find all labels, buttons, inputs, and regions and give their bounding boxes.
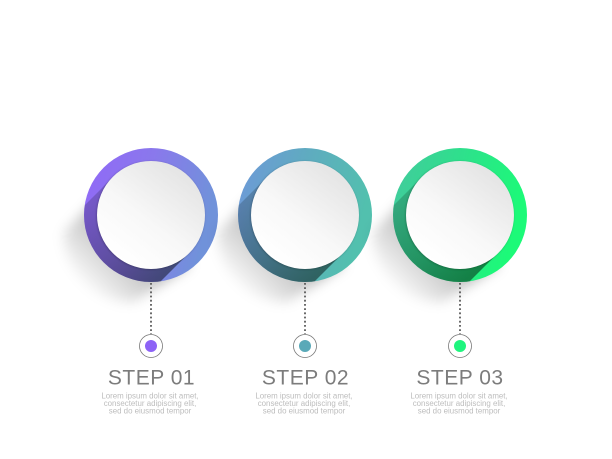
cast shadow 2: [218, 195, 345, 302]
text 2: consectetur adipiscing elit,: [258, 399, 350, 408]
long shadow 3: [393, 180, 496, 282]
connector 2: [304, 283, 306, 334]
long shadow 1: [84, 180, 187, 282]
text 1: Lorem ipsum dolor sit amet,: [101, 392, 199, 400]
long shadow 2: [238, 180, 341, 282]
connector 3: [459, 283, 461, 334]
text 3: sed do eiusmod tempor: [418, 406, 501, 416]
text 3: consectetur adipiscing elit,: [413, 399, 505, 408]
connector 1: [150, 283, 152, 334]
text 2: [255, 392, 353, 416]
cast shadow 3: [373, 195, 500, 302]
text 3: Lorem ipsum dolor sit amet,: [410, 392, 508, 400]
disc 1: [96, 161, 205, 270]
node 2: [294, 334, 316, 358]
disc 2: [250, 161, 359, 270]
ring 1: [84, 148, 218, 282]
ring 2: [238, 148, 372, 282]
step 1: [53, 148, 218, 416]
text 1: consectetur adipiscing elit,: [104, 399, 196, 408]
step 3: [362, 148, 527, 416]
text 1: sed do eiusmod tempor: [109, 406, 192, 416]
ring 3: [393, 148, 527, 282]
disc 3: [406, 161, 514, 270]
node 1: [140, 334, 162, 358]
text 2: Lorem ipsum dolor sit amet,: [255, 392, 353, 400]
heading 2: STEP 02: [262, 366, 349, 390]
text 3: [410, 392, 508, 416]
cast shadow 1: [64, 195, 191, 302]
text 1: [101, 392, 199, 416]
text 2: sed do eiusmod tempor: [263, 406, 346, 416]
node 3: [448, 334, 472, 358]
heading 1: STEP 01: [108, 366, 195, 390]
heading 3: STEP 03: [416, 366, 504, 390]
step 2: [207, 148, 372, 416]
